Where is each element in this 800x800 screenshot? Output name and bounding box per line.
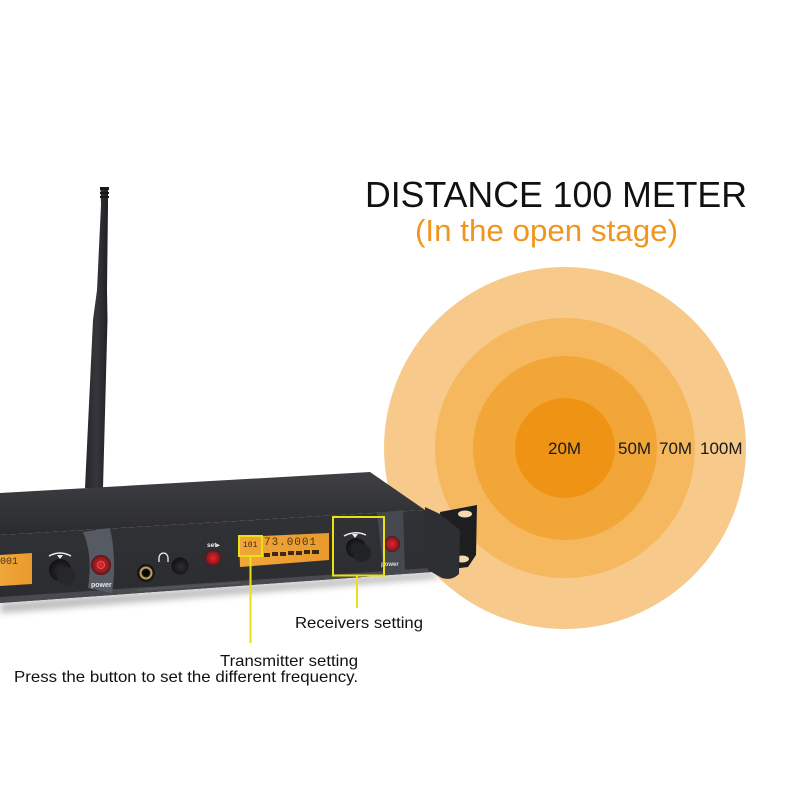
lcd frequency digits: 73.0001: [264, 537, 316, 549]
volume knob: [172, 558, 188, 574]
right power section: power: [381, 562, 399, 568]
set button: set▸: [207, 542, 220, 549]
top cover: [0, 472, 425, 535]
label: 50M: 50M: [618, 439, 651, 458]
callout: receivers highlight: [333, 517, 384, 608]
panel lower lip: [0, 568, 432, 603]
rack handle: [424, 507, 460, 579]
rack ear: [440, 505, 477, 570]
subtitle: (In the open stage): [415, 213, 678, 248]
lcd status icons: [264, 550, 319, 557]
label: 100M: 100M: [700, 439, 743, 458]
right knob: [344, 533, 371, 562]
set button: [205, 542, 221, 566]
label: 70M: 70M: [659, 439, 692, 458]
antenna: [85, 187, 109, 488]
right power section: [377, 510, 405, 574]
title: DISTANCE 100 METER: [365, 174, 747, 215]
left power section: power: [91, 582, 112, 589]
left lcd: [0, 553, 32, 586]
text: frequency instruction: Press the button to set the different frequency.: [14, 669, 358, 686]
text: receivers setting: Receivers setting: [295, 615, 423, 632]
left lcd digits: 001: [0, 557, 18, 568]
text: transmitter setting: Transmitter setting: [220, 653, 358, 670]
main lcd: [239, 533, 329, 567]
headphone jack: [137, 564, 155, 582]
receiver unit: [0, 472, 477, 613]
callout: transmitter highlight: 101: [243, 541, 258, 550]
callout: transmitter highlight: [239, 536, 262, 643]
label: 20M: 20M: [548, 439, 581, 458]
control strip line: [137, 582, 240, 591]
drop shadow: [0, 572, 440, 613]
left power section: [83, 528, 114, 593]
headphone icon: [159, 553, 168, 562]
left knob: [49, 553, 75, 585]
range circles chart: [384, 267, 746, 629]
front panel: [0, 510, 432, 603]
